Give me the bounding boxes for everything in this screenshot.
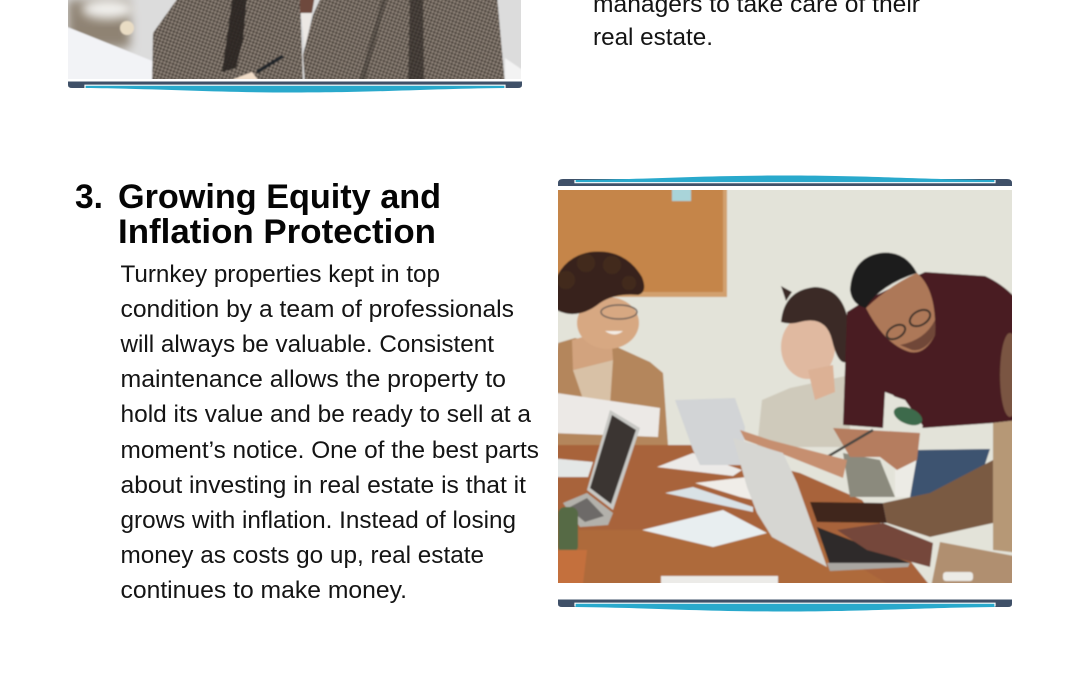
text block: point 3 body: about investing in real estate is that it [120, 472, 526, 499]
text block: point 3 body: maintenance allows the property to [120, 366, 506, 393]
photo frame bottom bar [558, 600, 1012, 612]
text block: point 3 body: continues to make money. [120, 577, 407, 604]
table [550, 445, 935, 592]
person on right: arms and jacket [810, 333, 1020, 592]
text: closing lines of point 2: real estate. [593, 24, 713, 51]
text block: point 3 body: hold its value and be ready to sell at a [120, 401, 532, 428]
large laptop [733, 438, 910, 571]
text block: point 3 body: condition by a team of professionals [120, 296, 514, 323]
photo frame top bar [558, 176, 1012, 186]
text block: point 3 body: Turnkey properties kept in top [120, 261, 440, 288]
text block: point 3 body: moment’s notice. One of the best parts [120, 437, 539, 464]
photo: team meeting around a table [550, 182, 1020, 592]
left laptop [563, 410, 640, 527]
tablet [657, 398, 745, 476]
woman in middle [757, 286, 895, 497]
corkboard [550, 182, 727, 297]
man in burgundy sweater [827, 253, 1020, 497]
forearm [740, 430, 847, 478]
wall [550, 182, 1020, 592]
heading: point 3 [75, 178, 441, 251]
heading: point 3: 3. [75, 178, 103, 216]
text: closing lines of point 2 [593, 0, 920, 51]
heading: point 3: Growing Equity and [118, 178, 441, 216]
cactus in pot [558, 506, 587, 583]
text block: point 3 body: money as costs go up, real estate [120, 542, 484, 569]
heading: point 3: Inflation Protection [118, 213, 436, 251]
text block: point 3 body [119, 261, 539, 604]
paper held by woman [550, 392, 660, 437]
photo: businesswoman in houndstooth blazer [68, 0, 521, 79]
text block: point 3 body: will always be valuable. Consistent [119, 331, 494, 358]
woman on left [550, 252, 668, 445]
text block: point 3 body: grows with inflation. Instead of losing [120, 507, 516, 534]
documents on table [550, 458, 778, 588]
top photo frame bar [68, 82, 522, 92]
